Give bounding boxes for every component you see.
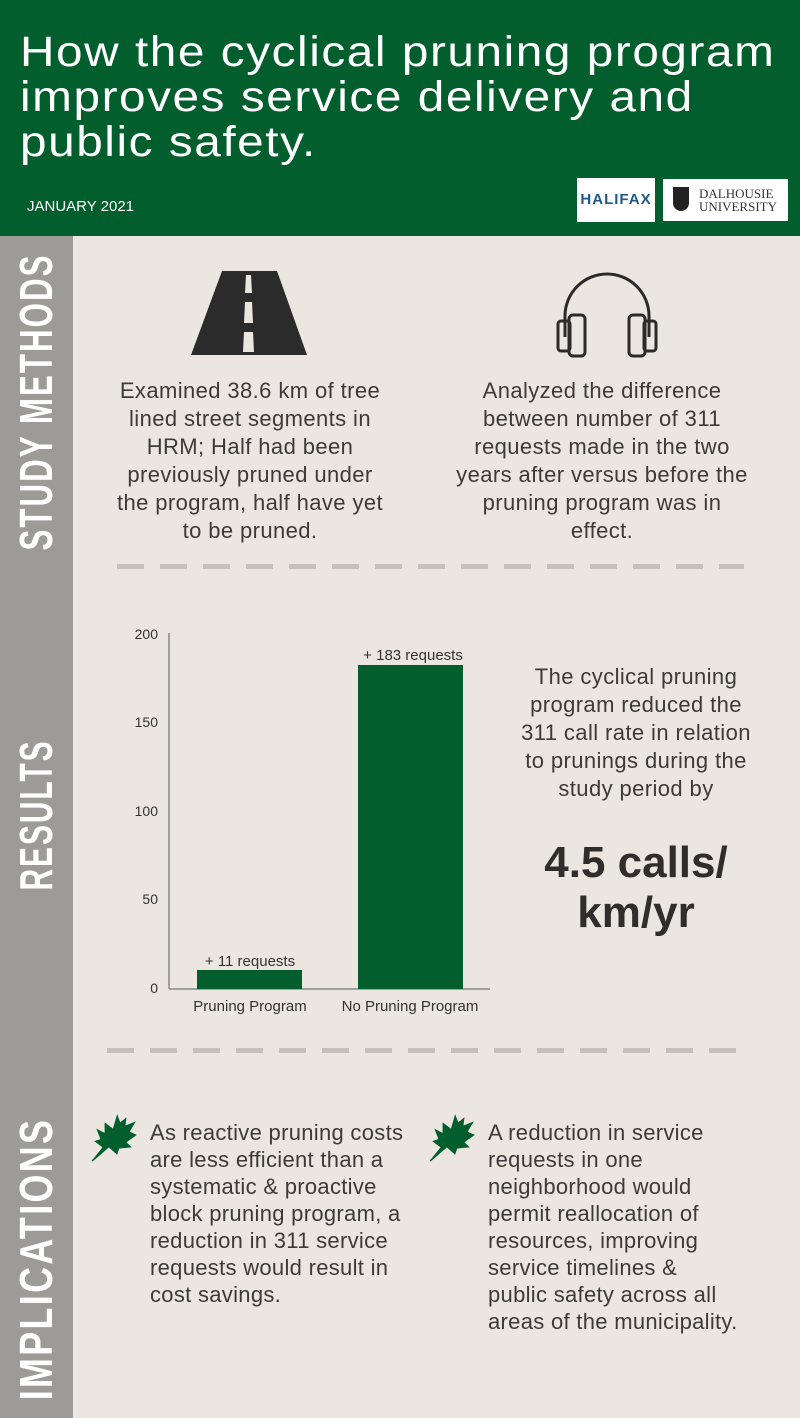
text: method 1: Examined 38.6 km of tree xyxy=(120,378,380,403)
text: result: The cyclical pruning xyxy=(535,664,737,689)
icon: leaf 2 xyxy=(430,1114,475,1162)
sidebar xyxy=(0,236,73,1418)
bar chart: No Pruning Program xyxy=(342,998,478,1015)
text: implication 2: A reduction in service xyxy=(488,1120,704,1145)
text: method 2: Analyzed the difference xyxy=(483,378,721,403)
text: implication 1: As reactive pruning costs xyxy=(150,1120,403,1145)
bar: no pruning program: + 183 requests xyxy=(363,647,463,664)
text: implication 2: neighborhood would xyxy=(488,1174,692,1199)
bar chart: 50 xyxy=(142,891,158,907)
logo: dalhousie: DALHOUSIE xyxy=(699,186,773,201)
icon: leaf 1 xyxy=(92,1114,137,1162)
title xyxy=(20,28,775,166)
sidebar label: results: RESULTS xyxy=(10,740,62,890)
text: method 2 xyxy=(456,378,748,543)
text: result: to prunings during the xyxy=(525,748,747,773)
text: result: program reduced the xyxy=(530,692,742,717)
bar: pruning program xyxy=(197,953,302,989)
logo: dalhousie xyxy=(663,179,788,221)
bar chart xyxy=(135,626,490,1015)
icon: headphones xyxy=(556,272,658,358)
icon: road xyxy=(191,271,307,355)
text: result: study period by xyxy=(558,776,714,801)
text: implication 2: service timelines & xyxy=(488,1255,677,1280)
text: method 2: effect. xyxy=(571,518,633,543)
title: public safety. xyxy=(20,118,317,166)
stat: 4.5 calls/km/yr xyxy=(544,838,728,937)
text: method 2: pruning program was in xyxy=(483,490,721,515)
stat: 4.5 calls/km/yr: 4.5 calls/ xyxy=(544,838,728,887)
text: implication 1 xyxy=(150,1120,403,1307)
bar: pruning program: + 11 requests xyxy=(205,953,295,970)
text: method 1: the program, half have yet xyxy=(117,490,383,515)
text: implication 1: reduction in 311 service xyxy=(150,1228,388,1253)
title: How the cyclical pruning program xyxy=(20,28,775,76)
bar: no pruning program xyxy=(358,647,463,989)
text: implication 2 xyxy=(488,1120,738,1334)
sidebar label: implications: IMPLICATIONS xyxy=(10,1118,62,1400)
header xyxy=(0,0,800,236)
text: implication 1: systematic & proactive xyxy=(150,1174,377,1199)
logo: halifax: HALIFAX xyxy=(580,191,652,208)
text: method 2: requests made in the two xyxy=(474,434,730,459)
text: method 1: HRM; Half had been xyxy=(147,434,353,459)
bar chart: 200 xyxy=(135,626,158,642)
text: implication 1: are less efficient than a xyxy=(150,1147,383,1172)
text: implication 2: requests in one xyxy=(488,1147,643,1172)
text: implication 2: areas of the municipality. xyxy=(488,1309,738,1334)
bar chart: 0 xyxy=(150,980,158,996)
logo: dalhousie: UNIVERSITY xyxy=(699,199,777,214)
text: method 1: previously pruned under xyxy=(127,462,373,487)
stat: 4.5 calls/km/yr: km/yr xyxy=(577,888,695,937)
text: method 1: lined street segments in xyxy=(129,406,371,431)
text: implication 1: cost savings. xyxy=(150,1282,281,1307)
text: method 2: years after versus before the xyxy=(456,462,748,487)
text: method 1: to be pruned. xyxy=(183,518,317,543)
text: implication 2: resources, improving xyxy=(488,1228,698,1253)
bar chart: 150 xyxy=(135,714,158,730)
logo: halifax xyxy=(577,178,655,222)
text: implication 1: block pruning program, a xyxy=(150,1201,401,1226)
text: implication 2: public safety across all xyxy=(488,1282,717,1307)
text: result: 311 call rate in relation xyxy=(521,720,751,745)
title: improves service delivery and xyxy=(20,73,694,121)
date: JANUARY 2021 xyxy=(27,198,134,215)
bar chart: Pruning Program xyxy=(193,998,307,1015)
text: method 1 xyxy=(117,378,383,543)
sidebar label: study methods: STUDY METHODS xyxy=(10,253,62,551)
text: method 2: between number of 311 xyxy=(483,406,721,431)
text: result xyxy=(521,664,751,801)
bar chart: 100 xyxy=(135,803,158,819)
text: implication 2: permit reallocation of xyxy=(488,1201,699,1226)
text: implication 1: requests would result in xyxy=(150,1255,388,1280)
